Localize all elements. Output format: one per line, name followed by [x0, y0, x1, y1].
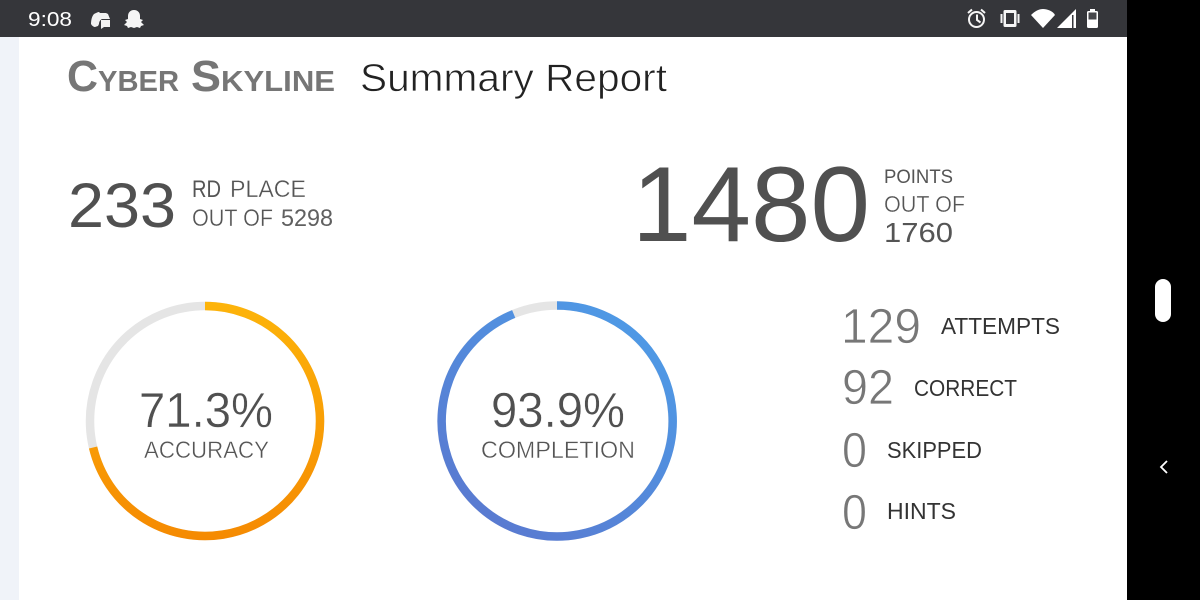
stat: attempts — [841, 300, 1060, 354]
icon: cell signal — [1057, 9, 1076, 28]
back chevron — [1161, 461, 1167, 473]
points label: POINTS — [884, 167, 953, 188]
gauge arc 93.9% — [442, 305, 673, 536]
android navigation rail — [1127, 0, 1200, 600]
rank label: 5298 — [281, 205, 333, 232]
rank label — [192, 176, 333, 232]
logo: Cyber Skyline — [67, 52, 335, 101]
points label — [884, 167, 965, 248]
points number: 1480 — [632, 144, 870, 264]
accuracy label: ACCURACY — [144, 437, 269, 464]
icon: battery — [1087, 9, 1098, 28]
stat: skipped: 0 — [842, 424, 867, 478]
icon: alarm clock — [968, 10, 985, 27]
accuracy value: 71.3% — [139, 384, 273, 438]
stat: skipped — [842, 424, 982, 478]
logo: Cyber Skyline: S — [191, 52, 221, 101]
status time: 9:08 — [28, 9, 72, 31]
gauge track — [442, 306, 672, 536]
panel: stats list — [841, 300, 1060, 540]
icon: snapchat ghost — [124, 10, 144, 28]
panel: completion gauge — [442, 305, 673, 536]
stat: correct: 92 — [842, 361, 894, 415]
icon: vibrate — [1000, 10, 1020, 27]
icon: discord notification — [91, 12, 110, 29]
points block — [632, 144, 965, 264]
home pill — [1155, 279, 1171, 322]
stat: skipped: SKIPPED — [887, 437, 982, 463]
stat: hints: 0 — [842, 486, 867, 540]
points label: 1760 — [884, 217, 953, 248]
title: Summary Report — [360, 57, 667, 100]
icon: wifi — [1031, 9, 1055, 28]
android status bar — [0, 0, 1127, 37]
completion label: COMPLETION — [481, 437, 635, 464]
completion value: 93.9% — [491, 384, 625, 438]
stat: attempts: ATTEMPTS — [941, 313, 1060, 339]
stat: correct — [842, 361, 1017, 415]
rank label: RD — [192, 176, 221, 203]
rank block — [68, 171, 333, 241]
logo: Cyber Skyline: C — [67, 52, 98, 101]
panel: accuracy gauge — [90, 306, 320, 536]
stat: attempts: 129 — [841, 300, 921, 354]
rank label: PLACE — [230, 176, 306, 203]
gauge track — [90, 306, 320, 536]
rank label: OUT OF — [192, 205, 273, 232]
gauge arc 71.3% — [93, 306, 320, 536]
stat: hints: HINTS — [887, 498, 956, 524]
stat: correct: CORRECT — [914, 375, 1017, 401]
stat: hints — [842, 486, 956, 540]
points label: OUT OF — [884, 191, 965, 217]
rank number: 233 — [68, 171, 176, 241]
logo: Cyber Skyline: YBER — [98, 66, 179, 98]
logo: Cyber Skyline: KYLINE — [221, 66, 335, 98]
